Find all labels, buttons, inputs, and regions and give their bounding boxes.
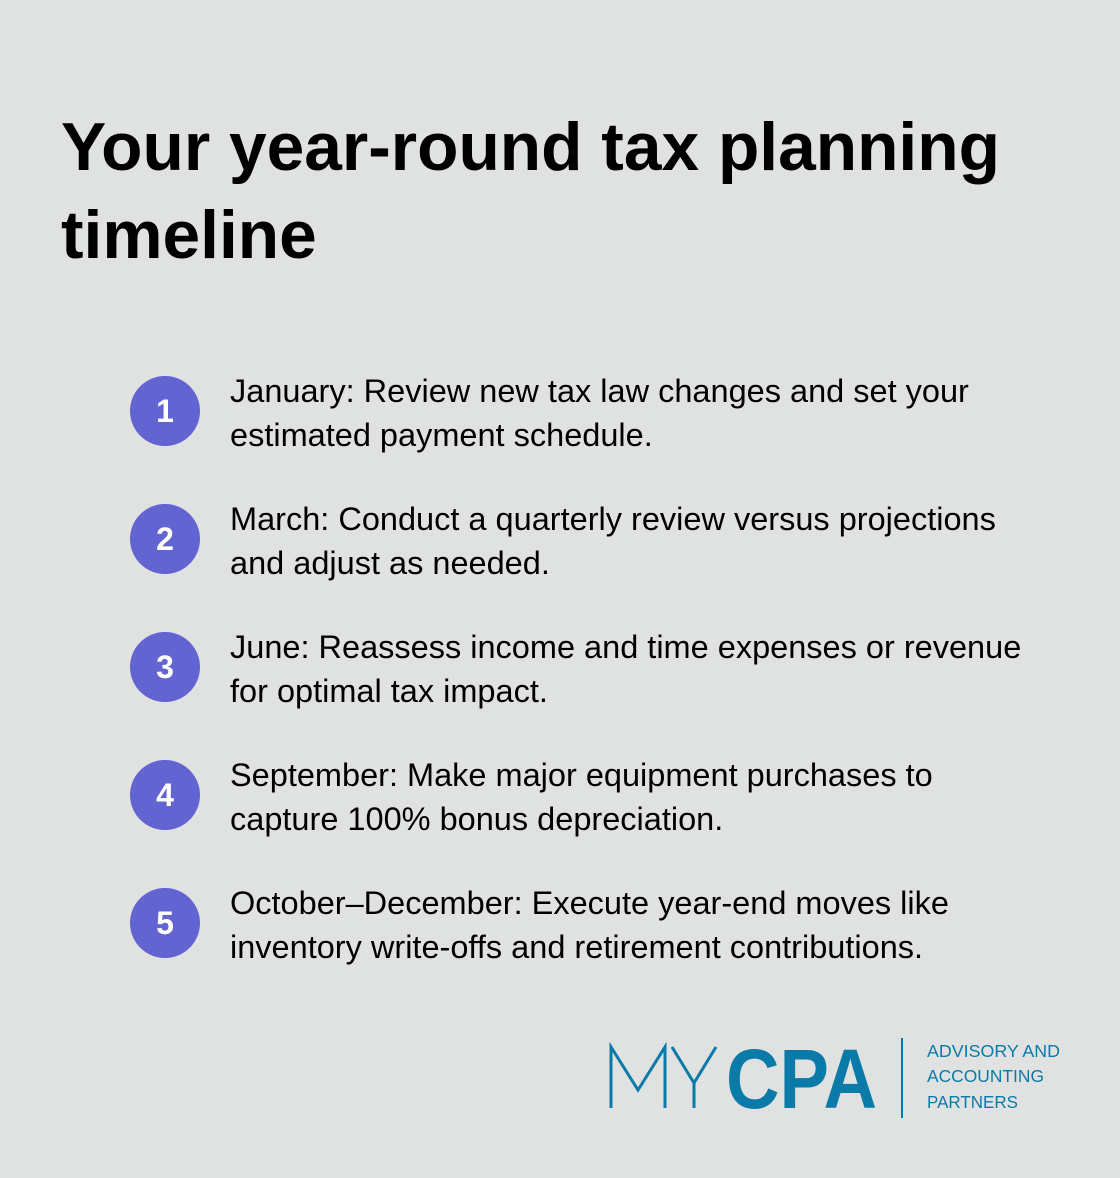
step 4: September: Make major equipment purchases to: [230, 757, 933, 793]
logo CPA: CPA: [726, 1032, 877, 1125]
step 1: January: Review new tax law changes and set your: [230, 373, 969, 409]
step 3: for optimal tax impact.: [230, 673, 548, 709]
step 5: October–December: Execute year-end moves like: [230, 885, 949, 921]
step 4: 4: [156, 777, 174, 813]
step 2: March: Conduct a quarterly review versus projections: [230, 501, 996, 537]
step 3: [130, 629, 1021, 709]
logo tagline: [927, 1041, 1060, 1112]
step 2: [130, 501, 996, 581]
step 1: estimated payment schedule.: [230, 417, 653, 453]
step 3: 3: [156, 649, 174, 685]
step 2: 2: [156, 521, 174, 557]
logo MY strokes: [611, 1047, 716, 1108]
step 3: June: Reassess income and time expenses or revenue: [230, 629, 1021, 665]
title: [61, 110, 1000, 273]
step 5: inventory write-offs and retirement contributions.: [230, 929, 923, 965]
logo: [610, 1032, 1060, 1125]
step 2: and adjust as needed.: [230, 545, 550, 581]
logo tagline: ADVISORY AND: [927, 1041, 1060, 1061]
step 5: [130, 885, 949, 965]
logo tagline: ACCOUNTING: [927, 1066, 1044, 1086]
title: timeline: [61, 198, 317, 273]
step 1: [130, 373, 969, 453]
step 5: 5: [156, 905, 174, 941]
step 1: 1: [156, 393, 174, 429]
title: Your year-round tax planning: [61, 110, 1000, 185]
step 4: [130, 757, 933, 837]
step 4: capture 100% bonus depreciation.: [230, 801, 723, 837]
logo tagline: PARTNERS: [927, 1092, 1018, 1112]
